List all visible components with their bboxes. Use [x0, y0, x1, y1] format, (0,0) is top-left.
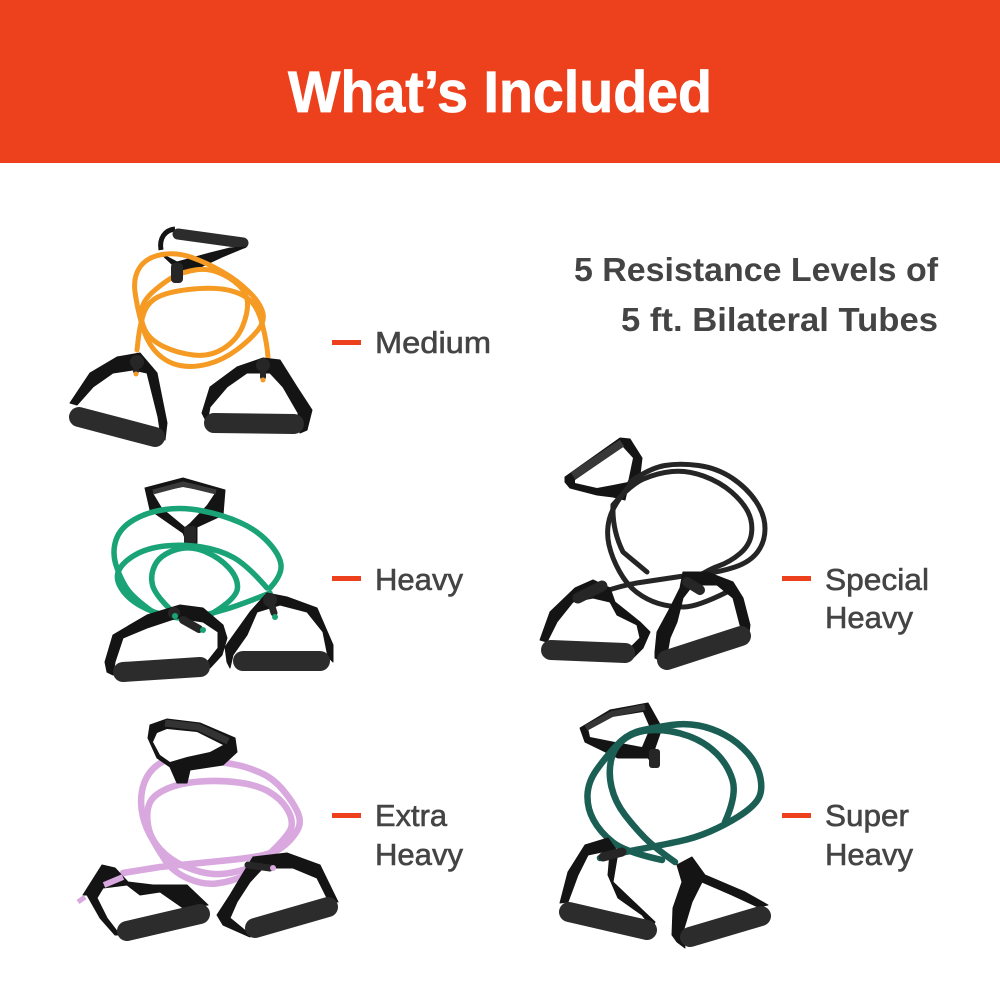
subtitle: 5 Resistance Levels of [574, 251, 939, 288]
icon: medium orange tube [70, 229, 312, 440]
label: special heavy: Heavy [825, 600, 913, 635]
label: medium [332, 325, 491, 360]
subtitle: 5 ft. Bilateral Tubes [621, 301, 938, 338]
icon: super heavy teal tube [560, 703, 768, 948]
icon: extra heavy purple tube [78, 719, 338, 937]
subtitle [574, 251, 939, 338]
label: special heavy: Special [825, 562, 929, 597]
icon: heavy green tube [105, 478, 333, 675]
icon: special heavy black tube [540, 438, 765, 662]
label: heavy [332, 562, 463, 597]
label: extra heavy: Extra [375, 798, 448, 833]
label: special heavy [782, 562, 929, 635]
label: medium: Medium [375, 325, 491, 360]
label: heavy: Heavy [375, 562, 463, 597]
label: extra heavy: Heavy [375, 837, 463, 872]
label: super heavy: Heavy [825, 837, 913, 872]
label: extra heavy [332, 798, 463, 872]
label: super heavy [782, 798, 913, 872]
label: super heavy: Super [825, 798, 909, 833]
title: What’s Included [288, 60, 712, 125]
header banner [0, 0, 1000, 163]
